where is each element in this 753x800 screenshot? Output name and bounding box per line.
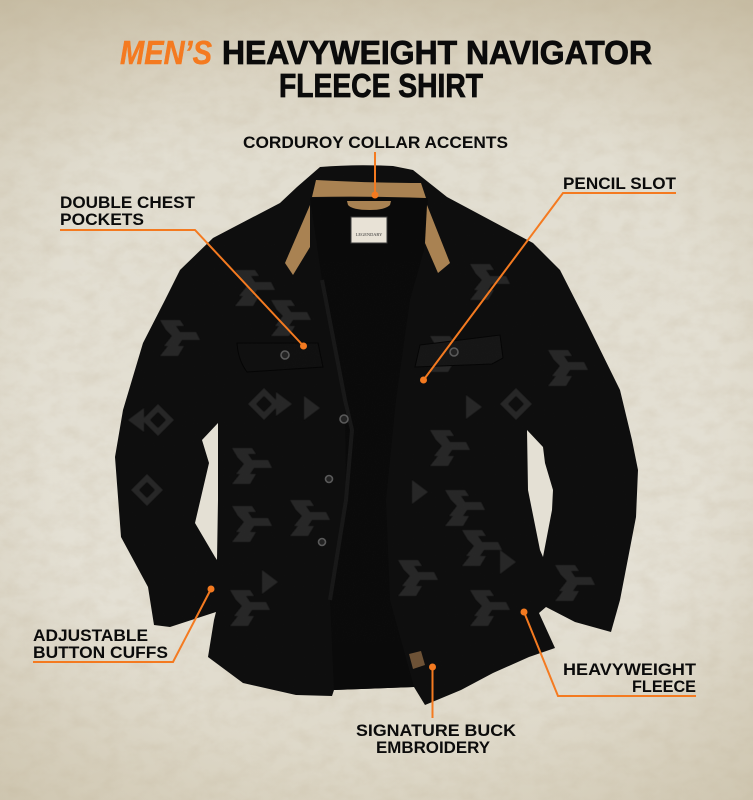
callout: corduroy collar accents: CORDUROY COLLAR ACCENTS (243, 134, 508, 152)
shirt body and sleeves silhouette (115, 165, 638, 705)
callout: heavyweight fleece (520, 608, 696, 696)
collar left accent (285, 205, 310, 275)
placket shadow (322, 280, 352, 600)
callout: adjustable button cuffs (33, 586, 214, 662)
callout: double chest pockets: POCKETS (60, 211, 144, 229)
left pocket flap (237, 343, 323, 372)
neck label (351, 217, 387, 243)
callout: adjustable button cuffs: BUTTON CUFFS (33, 644, 168, 662)
hang loop (347, 201, 391, 210)
title: MEN’S (120, 34, 212, 71)
collar right accent (425, 205, 450, 273)
right pocket flap (415, 335, 503, 367)
shirt photo illustration (115, 165, 640, 705)
callout: double chest pockets: DOUBLE CHEST (60, 194, 195, 212)
corduroy collar band (312, 180, 426, 198)
buttons (281, 348, 458, 546)
neck label: LEGENDARY (356, 232, 383, 237)
callout: pencil slot (420, 175, 676, 384)
armpit gap left (195, 423, 218, 560)
callout: heavyweight fleece: HEAVYWEIGHT (563, 661, 696, 679)
inner lining (310, 198, 428, 690)
callout: heavyweight fleece: FLEECE (632, 678, 696, 696)
aztec pattern (128, 264, 595, 626)
callout: signature buck embroidery: SIGNATURE BUCK (356, 722, 516, 740)
callout: signature buck embroidery: EMBROIDERY (376, 739, 490, 757)
title: FLEECE SHIRT (279, 67, 483, 104)
callout: signature buck embroidery (356, 664, 516, 757)
signature buck embroidery patch (409, 651, 425, 669)
callout: corduroy collar accents (243, 134, 508, 198)
armpit gap right (527, 430, 553, 557)
title: HEAVYWEIGHT NAVIGATOR (222, 34, 652, 71)
callout: pencil slot: PENCIL SLOT (563, 175, 676, 193)
callout: double chest pockets (60, 194, 307, 350)
callout: adjustable button cuffs: ADJUSTABLE (33, 627, 148, 645)
title (120, 34, 652, 104)
